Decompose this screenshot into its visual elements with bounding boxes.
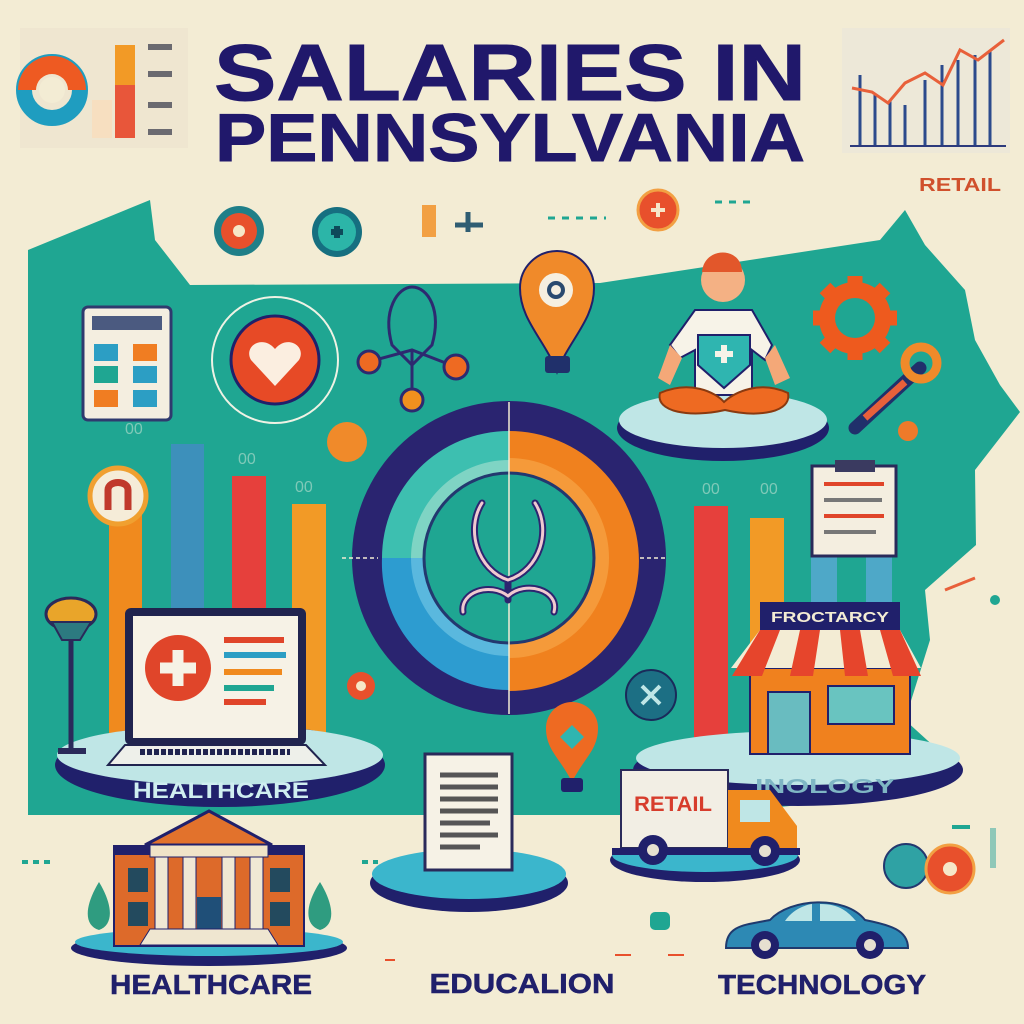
bottom labels: EDUCALION	[430, 968, 614, 999]
bottom labels: TECHNOLOGY	[718, 969, 926, 1000]
delivery truck with retail	[610, 770, 800, 882]
car	[726, 902, 908, 959]
Pennsylvania map	[28, 200, 1020, 815]
title: PENNSYLVANIA	[215, 100, 805, 176]
line chart: top right	[842, 28, 1010, 153]
scattered accent marks	[22, 578, 1000, 960]
donut and bars chart: top left	[18, 28, 188, 148]
bottom labels: HEALTHCARE	[110, 969, 312, 1000]
icon: wrench	[855, 347, 937, 428]
icon: map pin	[520, 251, 594, 373]
school building on platform	[71, 811, 347, 966]
storefront	[731, 602, 921, 754]
coin	[327, 422, 367, 462]
small platform with document	[370, 754, 568, 912]
left bar chart: 00	[125, 421, 143, 438]
icon: gear	[813, 276, 897, 360]
clipboard	[812, 460, 896, 556]
left platform with healthcare label	[55, 723, 385, 807]
icon: stethoscope network	[358, 287, 468, 411]
small badge icons	[347, 670, 676, 720]
meditating health worker on platform	[617, 252, 829, 461]
left bar chart	[90, 421, 326, 747]
center donut chart with stethoscope	[342, 401, 668, 715]
right bar chart: 00	[760, 481, 778, 498]
title	[214, 28, 806, 176]
paired circles	[884, 844, 974, 893]
small orange dot	[898, 421, 918, 441]
left bar chart: 00	[295, 479, 313, 496]
right bar chart: 00	[702, 481, 720, 498]
icon: street lamp	[46, 598, 96, 754]
retail label: top right: RETAIL	[919, 175, 1001, 195]
left bar chart: 00	[238, 451, 256, 468]
right platform with technology label	[633, 731, 963, 806]
delivery truck with retail: RETAIL	[634, 793, 712, 816]
right bar chart	[694, 481, 892, 756]
icon: calculator	[83, 307, 171, 420]
icons above map	[214, 190, 755, 257]
bottom labels	[110, 968, 926, 1000]
laptop	[108, 608, 325, 765]
icon: orange map pin	[546, 702, 598, 792]
platform label: INOLOGY	[755, 776, 896, 798]
icon: heart badge	[212, 297, 338, 423]
storefront: FROCTARCY	[771, 609, 889, 626]
platform label: HEALTHCARE	[133, 778, 309, 803]
title: SALARIES IN	[214, 28, 806, 117]
